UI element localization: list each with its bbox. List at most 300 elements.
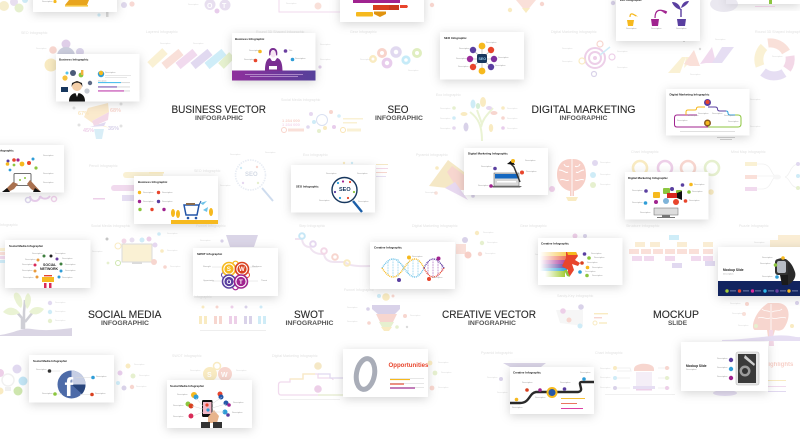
ghost infographic: SEO magnifier <box>194 151 276 201</box>
card: SEO hub: SEO Infographic <box>444 36 467 40</box>
card: runner: Description <box>594 256 605 259</box>
ghost infographic: eco tree top: Description <box>440 117 451 120</box>
ghost infographic: people columns: Infographic <box>194 295 212 299</box>
card: SEO hub: Description <box>486 41 497 44</box>
heading: mockup slide: MOCKUP <box>653 309 699 321</box>
card: SWOT: S <box>227 266 231 273</box>
card: watch mockup: Description <box>723 272 734 276</box>
ghost infographic: target digital marketing: Description <box>562 47 573 50</box>
card: shopping cart: Description <box>143 191 154 194</box>
ghost infographic: social right icons <box>116 363 150 390</box>
card: hand phone <box>167 380 252 428</box>
ghost infographic: funnel color: Description <box>347 320 358 323</box>
card: runner: Description <box>585 270 596 273</box>
ghost infographic: SEO magnifier: Description <box>265 151 276 154</box>
ghost infographic: monitor social: Description <box>167 232 178 235</box>
ghost infographic: round 3D label and text: Round 3D Shaped Infographic <box>256 30 305 34</box>
ghost infographic: round 3D label and text: Description <box>320 58 331 61</box>
card: laptop lamp: Description <box>481 165 492 168</box>
ghost infographic: SEO circles: SEO Infographic <box>21 31 48 35</box>
card: social network <box>5 240 90 288</box>
ghost infographic: target digital marketing: Digital Marketing Infographic <box>551 30 597 34</box>
heading: mockup slide: SLIDE <box>668 320 687 327</box>
ghost infographic: eco tree top: Description <box>507 107 518 110</box>
card: hand phone: Description <box>233 401 244 404</box>
ghost infographic: people columns <box>194 295 266 331</box>
ghost infographic: gear label with runner <box>520 224 587 256</box>
card: SWOT: Strength <box>203 265 212 268</box>
card: stepped path: Description <box>712 112 723 115</box>
ghost infographic: mind map <box>731 150 800 191</box>
heading: creative vector: INFOGRAPHIC <box>468 320 516 327</box>
ghost infographic: pyramid lower: Description <box>497 391 508 394</box>
ghost infographic: SEO magnifier: Description <box>220 184 231 187</box>
ghost infographic: highlights <box>713 362 794 396</box>
ghost infographic: mind map: Mind Map Infographic <box>731 150 766 154</box>
card: hand phone: Description <box>232 411 243 414</box>
ghost infographic: pyramid: Description <box>425 191 436 194</box>
ghost infographic: pencil <box>89 164 164 201</box>
card: stepped path: Description <box>698 112 709 115</box>
ghost infographic: brain bulb <box>549 159 611 201</box>
card: road: Description <box>512 406 523 409</box>
ghost infographic: SEO magnifier: Description <box>230 153 241 156</box>
ghost infographic: SWOT behind: W <box>221 372 228 379</box>
ghost infographic: funnel color <box>344 288 400 331</box>
ghost infographic: right of opportunities: Description <box>441 371 452 374</box>
ghost infographic: eco tree top: Eco Infographic <box>436 93 461 97</box>
card: SEO magnifier: Description <box>319 199 330 202</box>
ghost infographic: gears: Gear Infographic <box>350 30 377 34</box>
ghost infographic: SWOT behind: SWOT Infographic <box>172 354 202 358</box>
card: SEO hub: Description <box>456 57 467 60</box>
ghost infographic: right of opportunities: Description <box>438 386 449 389</box>
card: monitor megaphone: Description <box>692 190 703 193</box>
card: SWOT: SWOT Infographic <box>197 252 223 256</box>
ghost infographic: puzzle: Description <box>744 260 755 263</box>
card: road: Creative Infographic <box>513 370 541 374</box>
card: road: Description <box>560 381 571 384</box>
ghost infographic: funnel color: Funnel Infographic <box>344 288 374 292</box>
ghost infographic: eco tree top: Description <box>507 127 518 130</box>
card: stepped path: Digital Marketing Infographic <box>670 92 710 96</box>
heading: SEO: INFOGRAPHIC <box>375 115 423 122</box>
ghost infographic: tree hand: Description <box>55 319 66 322</box>
card: stepped path: Description <box>677 119 688 122</box>
card: SWOT: Opportunity <box>203 279 215 282</box>
card: business woman: Description <box>105 71 116 74</box>
ghost infographic: gears under tablet <box>26 196 56 202</box>
ghost infographic: funnel tip and round icons <box>188 0 615 14</box>
ghost infographic: monitor social <box>91 224 181 269</box>
card: road: Description <box>535 396 546 399</box>
card: shopping cart: Description <box>162 200 173 203</box>
card: runner: Description <box>592 274 603 277</box>
card: shopping cart: Description <box>143 200 154 203</box>
ghost infographic: gear digital <box>412 224 498 258</box>
card: social network: Description <box>65 269 76 272</box>
ghost infographic: step stairs <box>295 224 370 266</box>
heading: business vector: BUSINESS VECTOR <box>172 104 266 116</box>
ghost infographic: brain bulb: Description <box>600 161 611 164</box>
ghost infographic: tree hand <box>0 293 72 336</box>
card: SEO hub: Description <box>458 65 469 68</box>
ghost infographic: eco tree top: Description <box>440 107 451 110</box>
ghost infographic: gear label with runner: Description <box>535 253 546 256</box>
ghost infographic: step outline under card: Description <box>750 125 761 128</box>
card: hand phone: Description <box>173 404 184 407</box>
card: SEO hub <box>440 32 524 80</box>
ghost infographic: sankey map: Sandy-Key Infographic <box>557 294 594 298</box>
heading: business vector <box>172 104 266 122</box>
ghost infographic: puzzle: Puzzle Infographic <box>739 224 769 228</box>
heading: SWOT <box>286 309 334 327</box>
ghost infographic: lower chart brain: Description <box>600 367 611 370</box>
card: laptop lamp: Description <box>525 159 536 162</box>
card: business woman: Description <box>98 80 107 82</box>
ghost infographic: funnel tip and round icons: Description <box>188 3 199 6</box>
ghost infographic: 3D zigzag: Description <box>715 38 726 41</box>
ghost infographic: pyramid lower: Description <box>487 376 498 379</box>
card: business person purple: Description <box>295 57 306 60</box>
card: Facebook pie: Description <box>96 375 107 378</box>
card: plant growth pots: Description <box>676 27 687 30</box>
card: monitor megaphone: Description <box>632 189 643 192</box>
ghost infographic: pyramid lower: Pyramid Infographic <box>481 351 513 355</box>
ghost infographic: brain bulb: Description <box>600 173 611 176</box>
ghost infographic: chart rings <box>631 150 719 194</box>
heading: SWOT: SWOT <box>294 309 324 321</box>
ghost infographic: left descriptions <box>403 314 421 328</box>
card: business woman <box>56 54 140 102</box>
card: SWOT <box>193 248 278 296</box>
ghost infographic: top-left circles <box>0 0 135 17</box>
card: shopping cart: Description <box>162 191 173 194</box>
ghost infographic: tree brain <box>722 301 800 346</box>
ghost infographic: SWOT behind: Description <box>190 369 201 372</box>
card: SEO magnifier: Description <box>358 200 369 203</box>
card: SEO hub: SEO <box>478 57 486 61</box>
card: social network: Description <box>55 252 66 255</box>
ghost infographic: top-right blob <box>710 0 775 12</box>
ghost infographic: gears: Description <box>408 69 419 72</box>
ghost infographic: monitor social: Description <box>170 265 181 268</box>
ghost infographic: tree hand: Description <box>55 310 66 313</box>
card: road <box>510 367 594 414</box>
ghost infographic: target digital marketing <box>551 30 628 76</box>
heading: SWOT: INFOGRAPHIC <box>286 320 334 327</box>
ghost infographic: step outline under card: Description <box>750 98 761 101</box>
card: social network: Description <box>32 252 43 255</box>
card: tablet hands: Description <box>43 172 54 175</box>
card: laptop lamp <box>464 148 548 195</box>
card: watch mockup: Description <box>762 275 773 278</box>
ghost infographic: sankey map <box>556 294 608 328</box>
ghost infographic: SEO circles <box>21 31 84 72</box>
card: business woman: Business Infographic <box>59 58 89 62</box>
ghost infographic: SEO magnifier: SEO Infographic <box>194 169 221 173</box>
ghost infographic: SEO circles: Description <box>36 47 47 50</box>
ghost infographic: pyramid <box>416 153 475 200</box>
card: hand phone: Description <box>173 415 184 418</box>
card: SWOT: Weakness <box>252 266 262 268</box>
card: SEO magnifier: SEO Infographic <box>296 184 319 188</box>
ghost infographic: social media cloud: 1 234 000 <box>282 118 301 123</box>
ghost infographic: gear digital: Digital Marketing Infographic <box>412 224 458 228</box>
card: Facebook pie: Description <box>42 392 53 395</box>
ghost infographic: gears <box>350 30 420 72</box>
ghost infographic: social media cloud: Social Media Infographic <box>281 98 321 102</box>
ghost infographic: step lower: Digital Marketing Infographic <box>272 354 318 358</box>
card: watch mockup: Mockup Slide <box>723 268 744 272</box>
ghost infographic: right of opportunities: Description <box>438 361 449 364</box>
card: watch mockup <box>718 247 800 296</box>
card: runner: Creative Infographic <box>541 242 569 246</box>
ghost infographic: funnel top <box>196 224 258 247</box>
card: DNA: Description <box>432 276 443 279</box>
card: SWOT: O <box>226 279 232 286</box>
card: SEO magnifier: Description <box>326 172 337 175</box>
ghost infographic: brain bulb: Description <box>600 183 611 186</box>
ghost infographic: pencil: Pencil Infographic <box>89 164 118 168</box>
ghost infographic: pyramid lower <box>481 351 546 394</box>
ghost infographic: lower chart brain <box>595 351 675 395</box>
card: social network: Description <box>62 257 73 260</box>
ghost infographic: funnel tip and round icons: O <box>207 3 213 10</box>
ghost infographic: step outline under card <box>717 98 761 140</box>
card: social network: Description <box>22 263 33 266</box>
card: social network: Description <box>65 263 76 266</box>
heading: digital marketing: DIGITAL MARKETING <box>532 104 636 116</box>
card: watch mockup: Description <box>762 256 773 259</box>
heading: mockup slide <box>653 309 699 327</box>
ghost infographic: target digital marketing: Description <box>562 60 573 63</box>
heading: social media: INFOGRAPHIC <box>101 320 149 327</box>
ghost infographic: funnel top: Funnel Infographic <box>196 224 226 228</box>
ghost infographic: ribbon bulb: 45% <box>83 128 94 134</box>
card: SEO magnifier: SEO <box>339 187 351 193</box>
card: monitor megaphone: Description <box>632 201 643 204</box>
card: plant growth pots: Description <box>651 27 662 30</box>
ghost infographic: target digital marketing: Description <box>617 50 628 53</box>
card: Facebook pie <box>29 355 114 402</box>
ghost infographic: monitor social: Description <box>92 250 103 253</box>
heading: social media <box>88 309 162 327</box>
ghost infographic: round 3D label and text: Description <box>320 43 331 46</box>
card: plant growth pots <box>616 0 700 41</box>
card: business infographic gold: Description <box>42 0 53 3</box>
card: DNA: Description <box>412 255 423 258</box>
card: Facebook pie: Description <box>95 392 106 395</box>
ghost infographic: funnel color: Description <box>347 306 358 309</box>
ghost infographic: layered bars: Description <box>160 42 171 45</box>
card: business infographic gold <box>33 0 117 12</box>
card: top-right cut <box>726 0 800 4</box>
card: Facebook pie: Description <box>36 368 47 371</box>
ghost infographic: target digital marketing: Description <box>617 66 628 69</box>
ghost infographic: layered bars: Description <box>193 42 204 45</box>
ghost infographic: ribbon bulb <box>72 102 122 139</box>
ghost infographic: gears: Description <box>360 58 371 61</box>
ghost infographic: tree brain: Description <box>730 302 741 305</box>
ghost infographic: monitor social: Description <box>167 249 178 252</box>
ghost infographic: tree brain: Description <box>738 324 749 327</box>
card: SWOT: T <box>239 279 243 286</box>
card: stepped path: Description <box>728 120 739 123</box>
card: plant growth pots: Description <box>626 27 637 30</box>
card: stepped path <box>666 89 750 136</box>
card: social network: Description <box>23 276 34 279</box>
heading: SEO <box>375 104 423 122</box>
card: social network: SOCIAL <box>43 263 57 267</box>
ghost infographic: structure org chart: Structure Infographic <box>626 224 660 228</box>
card: shopping cart <box>134 176 218 224</box>
ghost infographic: social media cloud <box>281 98 363 133</box>
card: opportunities ring <box>343 349 429 397</box>
card: DNA <box>370 242 455 289</box>
ghost infographic: ribbon bulb: 67% <box>78 111 89 117</box>
ghost infographic: monitor social: Social Media Infographic <box>91 224 131 228</box>
card: social network: Description <box>62 276 73 279</box>
ghost infographic: right of opportunities <box>428 361 452 390</box>
heading: SEO: SEO <box>388 104 409 116</box>
ghost infographic: funnel tip and round icons: Description <box>286 2 297 5</box>
card: runner: Description <box>592 266 603 269</box>
ghost infographic: gear digital: Description <box>485 252 496 255</box>
ghost infographic: funnel top: Description <box>200 239 211 242</box>
ghost infographic: eco tree top: Description <box>440 127 451 130</box>
ghost infographic: structure org chart <box>626 224 715 268</box>
ghost infographic: 3D zigzag: Description <box>690 73 701 76</box>
card: SEO hub: Description <box>495 64 506 67</box>
card: business person purple: Title <box>288 49 293 52</box>
card: business person purple: Description <box>244 58 255 61</box>
heading: social media: SOCIAL MEDIA <box>88 309 162 321</box>
card: monitor megaphone <box>625 172 708 220</box>
card: shopping cart: Business Infographic <box>138 180 168 184</box>
ghost infographic: gear digital: Description <box>483 231 494 234</box>
card: watch mockup: Description <box>760 262 771 265</box>
ghost infographic: ribbon bulb: 35% <box>108 126 119 132</box>
card: SWOT: W <box>239 267 245 273</box>
ghost infographic: SEO magnifier: SEO <box>245 172 258 178</box>
ghost infographic: puzzle: Description <box>754 241 765 244</box>
heading: digital marketing: INFOGRAPHIC <box>560 115 608 122</box>
ghost infographic: layered bars: Layered Infographic <box>146 30 178 34</box>
card: laptop lamp: Description <box>526 170 537 173</box>
card: SWOT: Threat <box>261 279 267 282</box>
ghost infographic: step stairs: Step Infographic <box>299 224 325 228</box>
card: SEO magnifier: Description <box>357 172 368 175</box>
card: hand phone: Description <box>177 393 188 396</box>
card: business person purple: Description <box>249 49 260 52</box>
card: opportunities ring: Opportunities <box>388 362 429 369</box>
card: laptop lamp: Digital Marketing Infographic <box>468 152 508 156</box>
card: monitor megaphone: Description <box>689 199 700 202</box>
card: tablet hands: Description <box>43 181 54 184</box>
ghost infographic: lower chart brain: Description <box>600 386 611 389</box>
card: Facebook pie: Social Media Infographic <box>33 359 67 363</box>
card: runner <box>538 238 622 285</box>
card: stepped path: Description <box>724 114 735 117</box>
ghost infographic: tree brain: Description <box>732 312 743 315</box>
card: phone mockup: Description <box>717 366 728 369</box>
ghost infographic: round 3D ring <box>755 30 800 76</box>
ghost infographic: eco tree top <box>436 93 518 141</box>
ghost infographic: funnel tip and round icons: T <box>222 3 227 10</box>
card: phone mockup: Description <box>717 357 728 360</box>
card: monitor megaphone: Description <box>640 211 651 214</box>
ghost infographic: lower chart brain: Chart Infographic <box>595 351 623 355</box>
card: runner: Description <box>591 252 602 255</box>
ghost infographic: layered bars <box>146 30 232 66</box>
card: hand phone: Social Media Infographic <box>170 384 204 388</box>
card: road: Description <box>580 371 591 374</box>
ghost infographic: round 3D ring: Description <box>772 55 783 58</box>
ghost infographic: ribbon bulb: 68% <box>110 108 121 114</box>
ghost infographic: step lower <box>272 354 343 400</box>
ghost infographic: eco right strips: Eco Infographic <box>303 153 328 157</box>
card: tablet hands <box>0 145 64 192</box>
ghost infographic: social right icons: Description <box>134 363 145 366</box>
card: stepped path: Description <box>688 114 699 117</box>
card: monitor megaphone: Digital Marketing Infographic <box>628 176 668 180</box>
card: SEO magnifier <box>291 165 375 212</box>
heading: creative vector <box>442 309 536 327</box>
ghost infographic: bulb ideas <box>0 364 28 396</box>
card: SEO hub: Description <box>498 56 509 59</box>
ghost infographic: gear digital: Description <box>487 241 498 244</box>
ghost infographic: eco right strips <box>303 153 388 177</box>
card: SEO hub: Description <box>459 47 470 50</box>
ghost infographic: highlights: Highlights <box>764 362 794 368</box>
heading: business vector: INFOGRAPHIC <box>195 115 243 122</box>
card: business person purple: Business Infographic <box>235 37 265 41</box>
ghost infographic: left strips <box>0 223 18 263</box>
heading: creative vector: CREATIVE VECTOR <box>442 309 536 321</box>
ghost infographic: SWOT behind: S <box>207 372 212 379</box>
ghost infographic: pyramid: Pyramid Infographic <box>416 153 448 157</box>
ghost infographic: social right icons: Description <box>139 374 150 377</box>
ghost infographic: gear label with runner: Gear Infographic <box>520 224 547 228</box>
ghost infographic: left descriptions: Description <box>410 314 421 317</box>
card: business person purple <box>232 33 316 80</box>
ghost infographic: 3D zigzag <box>668 38 734 76</box>
card: phone mockup <box>681 342 768 391</box>
card: road: Description <box>522 381 533 384</box>
card: phone mockup: Mockup Slide <box>686 364 707 368</box>
card: social network: NETWORK <box>40 267 59 271</box>
ghost infographic: puzzle <box>739 224 800 263</box>
ghost infographic: left strips: Infographic <box>0 223 18 227</box>
card: DNA: Creative Infographic <box>374 246 402 250</box>
card: laptop lamp: Description <box>478 184 489 187</box>
ghost infographic: round 3D label and text <box>256 30 331 69</box>
ghost infographic: lower chart brain: Description <box>600 376 611 379</box>
ghost infographic: chart rings: Chart Infographic <box>631 150 659 154</box>
card: social network: Description <box>22 269 33 272</box>
card: runner: Description <box>587 261 598 264</box>
ghost infographic: tree hand: Description <box>55 301 66 304</box>
card: monitor megaphone: Description <box>694 183 705 186</box>
ghost infographic: SWOT behind: Description <box>236 369 247 372</box>
card: Facebook pie: f <box>64 372 74 402</box>
heading: digital marketing <box>532 104 636 122</box>
card: social network: Social Media Infographic <box>9 244 43 248</box>
card: opportunity top <box>340 0 424 22</box>
card: phone mockup: Description <box>717 375 728 378</box>
card: phone mockup: Description <box>686 368 697 371</box>
